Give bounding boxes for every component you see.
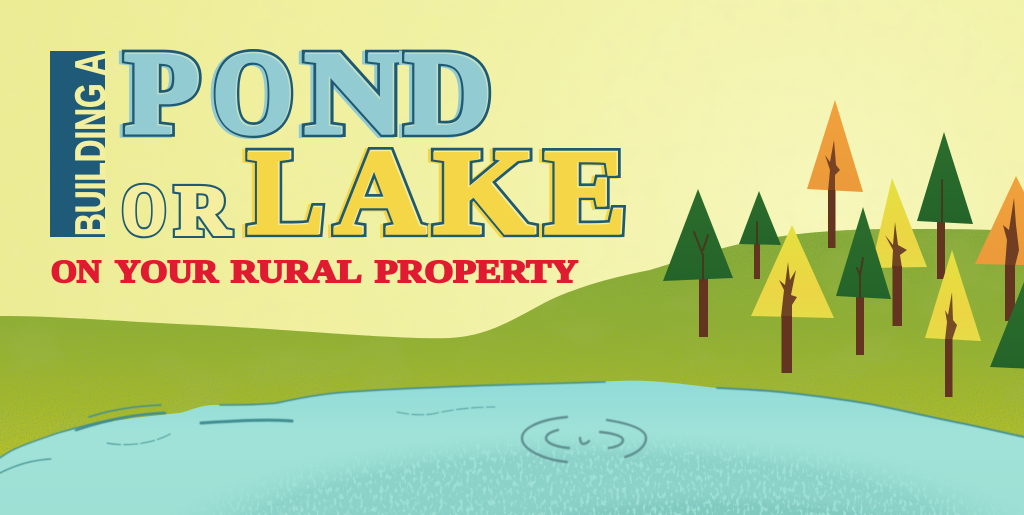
title: word LAKE: K xyxy=(434,125,535,259)
title: word POND: P xyxy=(125,27,200,158)
title: word LAKE: E xyxy=(544,126,626,260)
title: word POND: O xyxy=(210,28,291,159)
tree: large yellow xyxy=(751,225,834,373)
title: vertical band BUILDING A xyxy=(50,51,115,237)
tree: dark green right xyxy=(917,132,973,279)
title: word OR: O xyxy=(122,172,166,250)
title: word LAKE: K xyxy=(433,126,534,260)
tree: dark green cut off at edge xyxy=(990,282,1024,368)
lake: darker mottled water xyxy=(120,430,1024,515)
title: word LAKE: K xyxy=(431,126,532,260)
tree: yellow behind xyxy=(871,178,927,326)
title: word LAKE: K xyxy=(434,125,535,259)
title: word LAKE: A xyxy=(335,125,426,259)
title: word POND: D xyxy=(404,28,491,159)
title: word POND: N xyxy=(305,27,405,158)
trees xyxy=(663,100,1024,397)
title: word OR: O xyxy=(122,172,166,250)
title: word POND: P xyxy=(125,27,200,158)
lake: shoreline strokes xyxy=(0,382,1024,458)
title: word LAKE: L xyxy=(247,126,324,260)
title: word LAKE: A xyxy=(334,126,425,260)
tree: large dark green left xyxy=(663,189,733,337)
title: word POND: D xyxy=(405,27,492,158)
lake: water ripple strokes xyxy=(0,405,495,473)
title: word OR xyxy=(122,172,231,250)
title: word POND: O xyxy=(212,28,293,159)
title: word LAKE: L xyxy=(245,126,322,260)
title: word LAKE: L xyxy=(248,125,325,259)
subtitle: ON YOUR RURAL PROPERTY: ON xyxy=(51,253,101,289)
tree: yellow lower right xyxy=(925,250,981,397)
subtitle: ON YOUR RURAL PROPERTY: PROPERTY xyxy=(375,253,578,289)
title: word OR: R xyxy=(175,172,231,250)
title: word LAKE: E xyxy=(545,125,627,259)
tree: orange back xyxy=(807,100,863,248)
tree: orange far right xyxy=(975,176,1024,321)
title: word LAKE: E xyxy=(542,126,624,260)
title: word POND: P xyxy=(124,28,199,159)
title: word LAKE: A xyxy=(335,125,426,259)
title xyxy=(50,27,627,289)
title: word POND: N xyxy=(305,27,405,158)
title: word POND: D xyxy=(402,28,489,159)
title: word POND: O xyxy=(213,27,294,158)
title: word POND: O xyxy=(213,27,294,158)
title: word POND: D xyxy=(405,27,492,158)
lake: concentric ripple xyxy=(522,417,646,462)
subtitle: ON YOUR RURAL PROPERTY: YOUR xyxy=(115,253,219,289)
title: word LAKE: L xyxy=(248,125,325,259)
green hillside xyxy=(0,229,1024,515)
title: word LAKE xyxy=(245,125,627,260)
title: word POND: P xyxy=(122,28,197,159)
title: word POND: N xyxy=(302,28,402,159)
subtitle: ON YOUR RURAL PROPERTY xyxy=(51,253,578,289)
title: word POND xyxy=(122,27,492,159)
tree: small dark green xyxy=(739,191,781,279)
tree: dark green centre xyxy=(836,207,891,355)
subtitle: ON YOUR RURAL PROPERTY: RURAL xyxy=(231,253,362,289)
title: word LAKE: A xyxy=(332,126,423,260)
title: word LAKE: E xyxy=(545,125,627,259)
title: word OR: R xyxy=(175,172,231,250)
lake xyxy=(0,381,1024,515)
title: word POND: N xyxy=(304,28,404,159)
